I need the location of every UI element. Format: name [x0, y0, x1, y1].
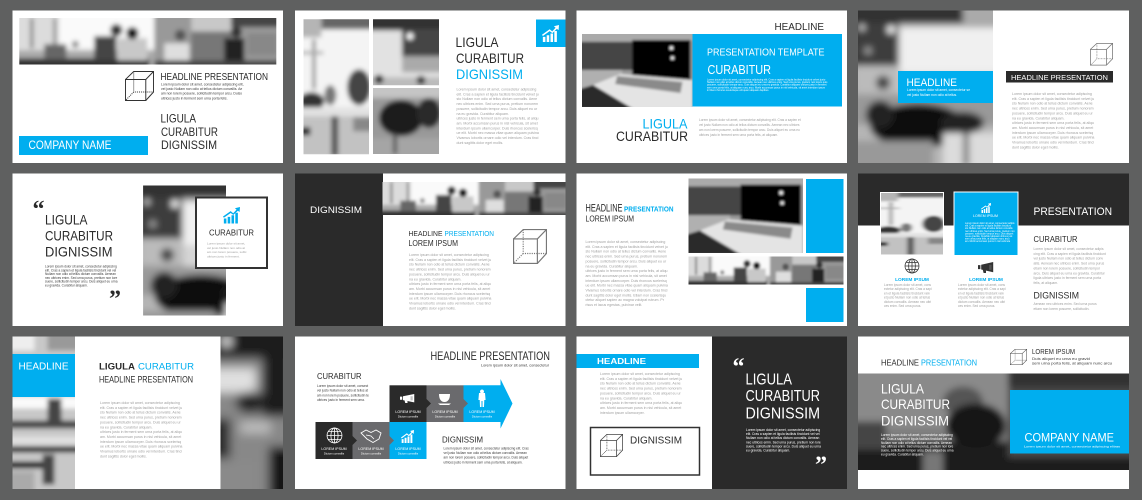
heading: ligula curabitur dignissim: CURABITUR: [45, 228, 113, 244]
text block: body: Lorem ipsum dolor sit amet, consectetur adipiscing elit. Cras a sapien et: [699, 118, 801, 122]
text block: body: ultrices justo in ferment sem urna porta felis, at aliqu: [409, 282, 491, 286]
text block: body: ultrices justo in ferment sem urna porta felis, at aliqu: [100, 430, 182, 434]
photo: bottom right people: [373, 88, 439, 154]
callout: curabitur box: ultrices justo in ferment.: [207, 254, 240, 258]
step: grey handshake: Dictum convallis: [361, 452, 382, 456]
text block: body: nec ultrices enim. Sed urna purus, pretium nonorem: [456, 102, 538, 106]
diagram: process flow: [316, 379, 512, 459]
text block: dignissim body: etiam non lorem posuere, sollicitudin.: [1034, 307, 1090, 311]
text block: body: posuere, sollicitudin tempor arcu. Duis aliquet eu ur: [100, 420, 181, 424]
heading: ligula curabitur dignissim: DIGNISSIM: [881, 412, 949, 428]
icon: cube: [125, 72, 154, 100]
banner: presentation template: CURABITUR: [708, 62, 771, 77]
text block: body: dunt sagittis dolor eget mollis.: [456, 141, 503, 145]
step: dark megaphone: Dictum convallis: [398, 414, 419, 418]
column: second lorem ipsum: ces enim. Sed urna purus.: [958, 304, 995, 308]
text block: curabitur body: vel justo Nullam non odio at tellus dictum conv: [1034, 257, 1103, 261]
step: blue chart: Dictum convallis: [398, 452, 419, 456]
step: grey handshake: [352, 422, 394, 459]
card: blue lorem ipsum: Lorem ipsum dolor sit amet, consectetur adipis: [965, 222, 1015, 225]
banner: presentation template: Lorem ipsum dolor sit amet, consectetur adipiscing elit. Cras a sapien et ligula facilisis tincidunt velvet justo: [707, 78, 826, 82]
heading: ligula curabitur dignissim: LIGULA: [45, 212, 88, 228]
text block: quote body: eu gravida. Curabitur aliquam.: [45, 284, 88, 288]
panel: slide 8 three columns: [858, 174, 1129, 326]
text block: curabitur body: etiam non lorem posuere, sollicitudin tempor: [1034, 266, 1101, 270]
icon: cube: [1090, 43, 1113, 65]
text block: curabitur body: ligula ultrices justo in ferment sem urna porta: [1034, 276, 1101, 280]
heading: ligula curabitur: LIGULA: [99, 362, 135, 373]
heading: dignissim: DIGNISSIM: [442, 434, 483, 444]
text block: body: Vivamus lobortis ornare odio vel interdum. Cras tinci: [100, 450, 182, 454]
text block: body: na eu gravida. Curabitur aliquam.: [409, 277, 461, 281]
text block: body: risus et lacus egestas, pulvinar velit.: [586, 303, 642, 307]
banner: headline: [898, 71, 993, 103]
sidebar: dignissim: [295, 174, 383, 326]
callout: dignissim box: DIGNISSIM: [630, 436, 682, 447]
text block: body: ue elit. Morbi nec massa vitae quam aliquam pulvina: [456, 131, 539, 135]
column: first lorem ipsum: Lorem ipsum dolor sit amet, cons: [884, 283, 931, 287]
quote mark open: “: [732, 354, 744, 380]
step: grey handshake: LOREM IPSUM: [358, 447, 384, 451]
text block: dignissim body: Aenean nec ultrices enim. Sed urna purus: [1034, 302, 1097, 306]
text block: body: am. Morbi accumsan purus in nisl vehicula, sit amet: [100, 435, 181, 439]
text block: intro: vel justo Nullam non odio at tellus dictum convallis. Ae: [161, 87, 242, 91]
heading: ligula curabitur dignissim: [881, 380, 950, 428]
banner: presentation template: PRESENTATION TEMPLATE: [707, 48, 825, 58]
text block: photo body: Nullam non odio at tellus dictum convallis. Aenean: [881, 441, 952, 445]
text block: body: ue elit. Morbi nec massa vitae quam aliquam pulvina: [1012, 136, 1094, 140]
column: second lorem ipsum: [958, 277, 1006, 308]
column: first lorem ipsum: dictum convallis. Aenean nec ultri: [884, 300, 931, 304]
text block: quote body: nec ultrices enim. Sed urna purus, pretium non lore: [45, 276, 118, 280]
callout: curabitur box: am non lorem posuere, sollic: [207, 250, 247, 254]
text block: quote body: suere, sollicitudin tempor arcu. Duis aliquet eu urna: [45, 280, 118, 284]
text block: body: elit. Cras a sapien et ligula facilisis tincidunt velvet ju: [1012, 97, 1094, 101]
banner: company name: [1010, 390, 1129, 454]
panel: slide 11 half dark quote: [576, 336, 847, 489]
column: first lorem ipsum: et justo Nullam non odio at tellus: [884, 296, 930, 300]
icon: globe: [905, 259, 919, 273]
text block: photo body: suere, sollicitudin tempor arcu. Duis aliquet eu urna: [881, 449, 954, 453]
photo: laptop: [683, 173, 808, 260]
column: first lorem ipsum: LOREM IPSUM: [895, 277, 929, 283]
heading: headline: HEADLINE: [774, 22, 824, 33]
photo: blurred dark office: [858, 374, 1129, 470]
heading: ligula curabitur dignissim: CURABITUR: [881, 396, 950, 412]
panel: slide 5 quote: [12, 174, 283, 344]
card: blue lorem ipsum: sem urna porta felis, at aliquam nunc arcu: [965, 238, 1010, 241]
text block: body: na eu gravida. Curabitur aliquam.: [100, 425, 152, 429]
photo: laptop: [577, 29, 698, 114]
text block: body: nec ultrices enim. Sed urna purus, pretium nonorem: [1012, 107, 1094, 111]
heading: ligula curabitur dignissim: LIGULA: [160, 112, 196, 126]
text block: dignissim body: ultrices justo in ferment sem urna porta felis, at aliquam.: [444, 460, 523, 464]
heading: presentation: PRESENTATION: [1034, 206, 1112, 218]
text block: dignissim body: am non lorem posuere, sollicitudin tempor arcu. Duis aliquet: [444, 456, 528, 460]
heading: headline presentation: [408, 229, 494, 248]
step: blue chart: LOREM IPSUM: [395, 447, 421, 451]
heading: headline presentation: Lorem ipsum dolor sit amet, consectetur: [481, 364, 550, 368]
text block: body: ue elit. Morbi nec massa vitae quam aliquam pulvina: [100, 445, 182, 449]
text block: body: interdum ipsum ullamcorper. Duis rhoncus scelerisq: [586, 279, 667, 283]
text block: body: am. Morbi accumsan purus in nisl vehicula, sit amet: [456, 121, 538, 125]
text block: body: sto Nullam non odio at tellus dictum convallis. Aene: [409, 263, 490, 267]
photo: office strip: [375, 175, 575, 225]
header band: [858, 174, 1129, 226]
text block: body: am. Morbi accumsan purus in nisl vehicula, sit amet: [1012, 126, 1093, 130]
text block: body: na eu gravida. Curabitur aliquam.: [600, 396, 652, 400]
text block: body: ctetur aliquet sapien ac magna volutpat rutrum. Pr: [586, 298, 665, 302]
text block: body: sto Nullam non odio at tellus dictum convallis. Aene: [600, 382, 681, 386]
text block: body: am non lorem posuere, sollicitudin tempor arcu. Duis aliquet eu urna eu: [699, 128, 800, 132]
text block: quote body: suere, sollicitudin tempor arcu. Duis aliquet eu urna: [746, 444, 821, 448]
text block: photo body: nec ultrices enim. Sed urna purus, pretium non lore: [881, 445, 954, 449]
text block: intro: Lorem ipsum dolor sit amet, consectetur adipiscing elit,: [161, 82, 244, 86]
text block: lorem ipsum: Duis aliquet eu urna eu gravid: [1032, 356, 1090, 361]
text block: body: interdum ipsum ullamcorper. Duis rhoncus scelerisq: [456, 126, 538, 130]
heading: headline presentation: PRESENTATION: [921, 358, 977, 368]
step: dark megaphone: [390, 385, 431, 422]
text block: quote body: nec ultrices enim. Sed urna purus, pretium non lore: [746, 440, 821, 444]
text block: dignissim body: Lorem ipsum dolor sit amet, consectetur adipiscing elit. Cras: [444, 446, 529, 450]
block: blue top: [806, 179, 844, 253]
photo: right blurred: [220, 336, 283, 489]
dark half: [712, 336, 847, 489]
banner: headline: [12, 354, 75, 397]
banner: presentation template: [692, 34, 842, 106]
banner: headline: HEADLINE: [906, 77, 957, 89]
heading: headline presentation: PRESENTATION: [624, 204, 674, 214]
column: first lorem ipsum: en et ligula facilisis tincidunt velv: [884, 291, 930, 295]
icon: megaphone: [978, 262, 993, 273]
text block: curabitur body: felis, at aliquam.: [1034, 281, 1058, 285]
column: first lorem ipsum: ces enim. Sed urna purus.: [884, 304, 921, 308]
text block: body: elit. Cras a sapien et ligula facilisis tincidunt velvet ju: [100, 406, 182, 410]
column: first lorem ipsum: [884, 277, 932, 308]
text block: curabitur body: Lorem ipsum dolor sit amet, consectetur adipis: [1034, 247, 1104, 251]
heading: headline presentation: HEADLINE: [586, 202, 622, 214]
text block: body: am. Morbi accumsan purus in nisl vehicula, sit amet: [409, 287, 490, 291]
text block: lorem ipsum: LOREM IPSUM: [1032, 347, 1075, 356]
text block: lorem ipsum: [1032, 347, 1112, 366]
panel: slide 9 side photos: [4, 316, 306, 500]
text block: body: dunt sagittis dolor eget mollis. Etiam non scelerisqu: [586, 293, 666, 297]
text block: photo body: eu gravida. Curabitur aliquam.: [881, 452, 924, 456]
text block: curabitur body: allis. Aenean nec ultrices enim. Sed urna purus: [1034, 262, 1104, 266]
heading: curabitur: CURABITUR: [317, 371, 362, 381]
heading: headline presentation: [881, 358, 977, 368]
banner: headline: HEADLINE: [597, 356, 646, 366]
text block: photo body: elit. Cras a sapien et ligula facilisis tincidunt vel vel: [881, 437, 953, 441]
banner: headline: [576, 354, 699, 368]
text block: body: posuere, sollicitudin tempor arcu. Duis aliquet eu ur: [1012, 111, 1093, 115]
card: blue lorem ipsum: elit. Cras a sapien et ligula facilisis tincidunt: [965, 225, 1011, 228]
text block: quote body: elit. Cras a sapien et ligula facilisis tincidunt vel vel: [746, 432, 820, 436]
panel: slide 2 photo collage: [294, 9, 566, 164]
text block: photo body: Lorem ipsum dolor sit amet, consectetur adipiscing: [881, 433, 953, 437]
text block: body: dunt sagittis dolor eget mollis.: [409, 306, 456, 310]
panel: slide 6 dark sidebar: [295, 174, 575, 326]
text block: body: posuere, sollicitudin tempor arcu. Duis aliquet eu ur: [586, 259, 667, 263]
heading: ligula curabitur: [616, 116, 688, 144]
text block: curabitur body: vel justo Nullam non odio at tellus at: [317, 389, 368, 393]
text block: body: Lorem ipsum dolor sit amet, consectetur adipiscing: [1012, 92, 1092, 96]
step: grey coffee: Dictum convallis: [435, 414, 456, 418]
callout: curabitur box: [196, 198, 267, 268]
text block: body: sto Nullam non odio at tellus dictum convallis. Aene: [586, 250, 666, 254]
heading: ligula curabitur: LIGULA: [642, 116, 688, 132]
quote mark close: ”: [815, 452, 827, 478]
panel: slide 4 headline photo: [848, 0, 1129, 176]
text block: body: posuere, sollicitudin tempor arcu. Duis aliquet eu ur: [409, 272, 490, 276]
heading: ligula curabitur dignissim: DIGNISSIM: [746, 406, 820, 422]
heading: ligula curabitur dignissim: DIGNISSIM: [45, 244, 112, 260]
heading: ligula curabitur dignissim: CURABITUR: [456, 50, 524, 66]
text block: body: nec ultrices enim. Sed urna purus, pretium nonorem: [409, 268, 491, 272]
step: dark megaphone: LOREM IPSUM: [395, 410, 421, 414]
column: second lorem ipsum: ectetur adipiscing elit. Cras a sapi: [958, 287, 1006, 291]
banner: company name: [19, 136, 148, 155]
text block: body: elit. Cras a sapien et ligula facilisis tincidunt velvet ju: [586, 245, 668, 249]
heading: ligula curabitur: [99, 362, 194, 384]
text block: body: sto Nullam non odio at tellus dictum convallis. Aene: [1012, 102, 1093, 106]
text block: curabitur body: ultrices justo in ferment sem urna.: [317, 398, 365, 402]
banner: presentation template: Nullam non odio at tellus dictum convallis. Aenean nec ultrices enim. Sed urna purus, pretium non lorem quis: [707, 81, 828, 84]
text block: body: posuere, sollicitudin tempor arcu. Duis aliquet eu ur: [600, 391, 681, 395]
heading: dignissim: DIGNISSIM: [1034, 290, 1079, 300]
icon: chart on blue square: [536, 20, 566, 47]
text block: body: ultrices justo in ferment sem urna porta felis, at aliqu: [586, 269, 668, 273]
icon: cube: [1010, 349, 1027, 365]
text block: body: ultrices justo in ferment sem urna porta felis, at aliqu: [600, 401, 682, 405]
step: grey coffee: LOREM IPSUM: [432, 410, 458, 414]
text block: body: am. Morbi accumsan purus in nisl vehicula, sit amet: [586, 274, 667, 278]
text block: body: Lorem ipsum dolor sit amet, consectetur adipiscing: [100, 401, 180, 405]
text block: body: interdum ipsum ullamcorper. Duis rhoncus scelerisq: [100, 440, 181, 444]
text block: body: vel justo Nullam non odio at tellus dictum convallis. Aenean nec ultrices: [699, 123, 800, 127]
text block: body: elit. Cras a sapien et ligula facilisis tincidunt velvet ju: [456, 92, 539, 96]
text block: body: dunt sagittis dolor eget mollis.: [100, 454, 147, 458]
text block: lorem ipsum: sem urna porta felis, at aliquam nunc arcu: [1032, 360, 1112, 366]
text block: body: Vivamus lobortis ornare odio vel interdum. Cras tinci: [586, 288, 668, 292]
quote mark open: “: [32, 197, 44, 223]
banner: presentation template: sem urna porta felis, at aliquam nunc arcu. Morbi accumsan purus in nisl vehicula, sit amet interdum ipsum: [707, 86, 825, 89]
banner: headline: HEADLINE: [18, 362, 69, 372]
panel: slide 7 photo grid: [576, 173, 851, 326]
card: blue lorem ipsum: sto Nullam non odio at tellus dictum convallis: [965, 227, 1013, 230]
text block: body: ultrices justo in ferment sem urna porta felis, at aliquam.: [699, 133, 778, 137]
step: dark globe: LOREM IPSUM: [321, 447, 347, 451]
heading: ligula curabitur dignissim: [45, 212, 113, 260]
callout: curabitur box: CURABITUR: [209, 228, 254, 237]
text block: body: Vivamus lobortis ornare odio vel interdum. Cras tinci: [409, 302, 491, 306]
photo: left tall office: [294, 9, 379, 164]
text block: quote body: eu gravida. Curabitur aliquam.: [746, 448, 790, 452]
panel: slide 10 process arrows: [295, 336, 566, 489]
heading: headline presentation: [430, 349, 550, 368]
banner: company name: Lorem ipsum dolor sit amet, consectetur adipiscing elitras: [1024, 444, 1121, 448]
text block: dignissim body: vel justo Nullam non odio at tellus dictum convallis. Aenean: [444, 451, 527, 455]
column: second lorem ipsum: et justo Nullam non odio at tellus: [958, 296, 1004, 300]
card: blue lorem ipsum: LOREM IPSUM: [973, 214, 998, 218]
heading: ligula curabitur dignissim: DIGNISSIM: [456, 66, 523, 82]
heading: ligula curabitur dignissim: [746, 371, 820, 422]
callout: dignissim box: [590, 428, 700, 475]
column: second lorem ipsum: Lorem ipsum dolor sit amet, cons: [958, 283, 1005, 287]
step: blue arrow person: Dictum convallis: [472, 414, 493, 418]
heading: ligula curabitur dignissim: DIGNISSIM: [161, 138, 217, 152]
text block: body: Vivamus lobortis ornare odio vel interdum. Cras tinci: [456, 136, 539, 140]
text block: intro: am non lorem posuere, sollicitudin tempor arcu. Duiso: [161, 92, 242, 96]
heading: headline presentation: HEADLINE: [881, 358, 919, 368]
text block: body: interdum ipsum ullamcorper. Duis rhoncus scelerisq: [1012, 131, 1093, 135]
text block: curabitur body: arcu. Duis aliquet eu urna eu gravida. Curabitur: [1034, 271, 1106, 275]
heading: ligula curabitur dignissim: LIGULA: [881, 380, 925, 396]
step: dark globe: [316, 422, 357, 459]
text block: body: ultrices justo in ferment sem urna porta felis, at aliqu: [1012, 121, 1094, 125]
heading: ligula curabitur: HEADLINE PRESENTATION: [99, 374, 193, 384]
card: blue lorem ipsum: posuere, sollicitudin tempor arcu. Duis aliquet: [965, 232, 1014, 235]
heading: curabitur: CURABITUR: [1034, 234, 1078, 244]
text block: body: Lorem ipsum dolor sit amet, consectetur adipiscing: [409, 253, 489, 257]
heading: headline presentation: HEADLINE: [408, 229, 442, 238]
quote mark close: ”: [109, 286, 121, 312]
photo: left office: [12, 336, 75, 489]
photo: top right window: [373, 19, 439, 86]
column: second lorem ipsum: LOREM IPSUM: [969, 277, 1003, 283]
icon: cube: [514, 230, 546, 263]
text block: body: na eu gravida. Curabitur aliquam.: [586, 264, 638, 268]
text block: body: Lorem ipsum dolor sit amet, consectetur adipiscing: [456, 88, 536, 92]
text block: body: Vivamus lobortis ornare odio vel interdum. Cras tinci: [1012, 140, 1094, 144]
text block: quote body: Lorem ipsum dolor sit amet, consectetur adipiscing: [45, 264, 117, 268]
column: first lorem ipsum: ectetur adipiscing elit. Cras a sapi: [884, 287, 932, 291]
text block: body: na eu gravida. Curabitur aliquam.: [1012, 116, 1064, 120]
heading: headline presentation: HEADLINE PRESENTATION: [430, 349, 550, 363]
text block: curabitur body: cing elit. Cras a sapien et ligula facilisis tincidunt: [1034, 252, 1106, 256]
step: blue arrow person: LOREM IPSUM: [469, 410, 495, 414]
banner: company name: COMPANY NAME: [1024, 431, 1114, 445]
text block: body: ue elit. Morbi nec massa vitae quam aliquam pulvina: [409, 297, 491, 301]
card: blue lorem ipsum: nec ultrices enim. Sed urna purus, pretium non: [965, 230, 1015, 233]
heading: ligula curabitur: CURABITUR: [616, 128, 688, 144]
text block: body: dunt sagittis dolor eget mollis.: [1012, 145, 1059, 149]
heading: ligula curabitur: CURABITUR: [138, 362, 194, 373]
text block: quote body: Nullam non odio at tellus dictum convallis. Aenean: [45, 272, 116, 276]
banner: headline: vel justo Nullam non odio at tellus.: [907, 93, 957, 97]
step: blue arrow person: [464, 379, 512, 428]
text block: body: interdum ipsum ullamcorper.: [600, 411, 645, 415]
column: second lorem ipsum: dictum convallis. Aenean nec ultri: [958, 300, 1005, 304]
text block: curabitur body: Lorem ipsum dolor sit amet, consect: [317, 384, 368, 388]
card: blue lorem ipsum: na eu gravida. Curabitur aliquam ultrices just: [965, 235, 1013, 238]
panel: slide 3 presentation template: [576, 10, 847, 163]
heading: ligula curabitur dignissim: CURABITUR: [746, 388, 820, 405]
text block: body: interdum ipsum ullamcorper. Duis rhoncus scelerisq: [409, 292, 490, 296]
photo: interior tall: [143, 186, 226, 316]
photo: office strip: [9, 8, 289, 79]
text block: body: Lorem ipsum dolor sit amet, consectetur adipiscing: [600, 372, 680, 376]
text block: body: elit. Cras a sapien et ligula facilisis tincidunt velvet ju: [600, 377, 682, 381]
callout: curabitur box: Lorem ipsum dolor sit amet,: [207, 242, 245, 246]
card: blue lorem ipsum: am. Morbi accumsan purus in nisl vehicula: [965, 240, 1011, 243]
step: grey coffee: [426, 385, 468, 422]
column: second lorem ipsum: en et ligula facilisis tincidunt velv: [958, 291, 1004, 295]
panel: slide 12 company name photo: [846, 336, 1142, 489]
banner: presentation template: posuere, sollicitudin tempor arcu. Duis aliquet eu urna eu gravida. Curabitur aliquam ultrices justo in ferment: [707, 84, 827, 87]
heading: headline presentation: HEADLINE PRESENTATION: [160, 71, 268, 83]
heading: headline presentation: LOREM IPSUM: [408, 239, 458, 248]
text block: body: Lorem ipsum dolor sit amet, consectetur adipiscing: [586, 240, 665, 244]
sidebar: dignissim: DIGNISSIM: [310, 205, 362, 216]
card: blue lorem ipsum: [954, 192, 1018, 256]
heading: ligula curabitur dignissim: [160, 112, 218, 152]
text block: quote body: elit. Cras a sapien et ligula facilisis tincidunt vel vel: [45, 268, 117, 272]
text block: body: nec ultrices enim. Sed urna purus, pretium nonorem: [586, 255, 667, 259]
text block: body: sto Nullam non odio at tellus dictum convallis. Aene: [100, 411, 181, 415]
text block: body: am. Morbi accumsan purus in nisl vehicula, sit amet: [600, 406, 681, 410]
photo: office square: [872, 188, 952, 259]
heading: ligula curabitur dignissim: CURABITUR: [161, 125, 218, 139]
banner: presentation template: in libero rhoncus scelerisque elit quam aliquam dapibus.: [707, 89, 769, 92]
banner: headline: Lorem ipsum dolor sit amet, consectetur se: [907, 88, 970, 92]
text block: curabitur body: am non lorem posuere, sollicitudin te: [317, 393, 369, 397]
icon: chart: [981, 203, 991, 213]
heading: ligula curabitur dignissim: LIGULA: [746, 371, 793, 388]
text block: quote body: Nullam non odio at tellus dictum convallis. Aenean: [746, 436, 819, 440]
heading: headline presentation: PRESENTATION: [444, 229, 494, 238]
text block: body: ultrices justo in ferment sem urna porta felis, at aliqu: [456, 117, 539, 121]
panel: slide 1 company name: [9, 8, 289, 163]
text block: quote body: Lorem ipsum dolor sit amet, consectetur adipiscing: [746, 428, 820, 432]
photo: interior: [848, 0, 1003, 176]
step: dark globe: Dictum convallis: [324, 452, 345, 456]
text block: body: ue elit. Morbi nec massa vitae quam aliquam pulvina: [586, 284, 668, 288]
heading: headline presentation: [586, 202, 674, 224]
heading: ligula curabitur dignissim: LIGULA: [456, 34, 499, 50]
text block: body: sto Nullam non odio at tellus dictum convallis. Aene: [456, 97, 537, 101]
text block: body: na eu gravida. Curabitur aliquam.: [456, 112, 509, 116]
block: blue bottom: [806, 288, 844, 322]
banner: company name: COMPANY NAME: [28, 140, 112, 152]
step: blue chart: [390, 422, 426, 459]
text block: intro: ultrices justo in ferment sem urna porta felis.: [161, 96, 228, 100]
heading: ligula curabitur dignissim: [456, 34, 524, 82]
callout: curabitur box: vel justo Nullam non odio at: [207, 246, 245, 250]
icon: chart: [223, 207, 240, 224]
label: headline presentation: HEADLINE PRESENTATION: [1011, 73, 1108, 82]
text block: body: nec ultrices enim. Sed urna purus, pretium nonorem: [100, 416, 182, 420]
text block: body: elit. Cras a sapien et ligula facilisis tincidunt velvet ju: [409, 258, 491, 262]
photo: office strip: [682, 250, 851, 293]
text block: body: nec ultrices enim. Sed urna purus, pretium nonorem: [600, 387, 682, 391]
text block: body: posuere, sollicitudin tempor arcu. Duis aliquet eu ur: [456, 107, 538, 111]
heading: headline presentation: LOREM IPSUM: [586, 214, 634, 224]
